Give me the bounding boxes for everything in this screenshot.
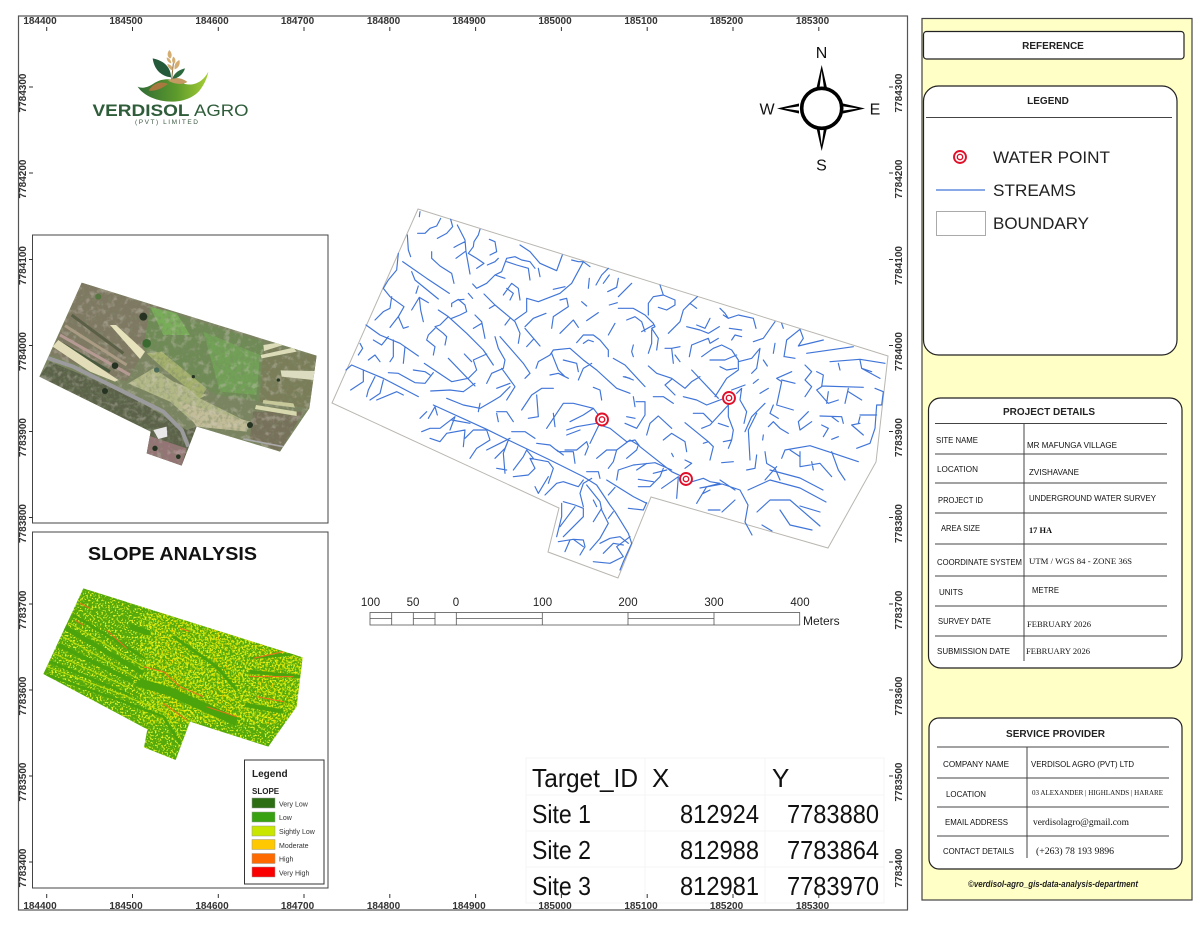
logo name: VERDISOL — [92, 102, 190, 120]
provider rows — [943, 759, 1163, 857]
project rows: ZVISHAVANE — [1029, 467, 1079, 477]
bottom coordinate labels: 185100 — [624, 901, 658, 912]
row: site 1: 812924 — [680, 799, 759, 829]
row: site 3: 812981 — [680, 871, 759, 901]
provider rows: COMPANY NAME — [943, 759, 1009, 769]
provider rows: LOCATION — [946, 789, 986, 799]
scale bar: 300 — [704, 597, 724, 609]
project rows: UTM / WGS 84 - ZONE 36S — [1029, 556, 1132, 566]
logo emblem — [138, 50, 208, 102]
top coordinate labels: 185300 — [796, 16, 830, 27]
right coordinate labels: 7783900 — [894, 418, 905, 457]
slope class: moderate: Moderate — [279, 843, 309, 850]
panel: project details — [928, 398, 1182, 668]
table header: Target_ID — [532, 763, 638, 793]
legend: streams — [936, 182, 1076, 200]
left coordinate labels: 7784300 — [18, 73, 29, 112]
top coordinate labels: 184400 — [23, 16, 57, 27]
provider rows: (+263) 78 193 9896 — [1036, 846, 1114, 857]
project rows: UNITS — [939, 587, 963, 597]
table header: Y — [772, 763, 789, 793]
north arrow compass: W — [759, 102, 775, 118]
panel: project details: PROJECT DETAILS — [1003, 406, 1095, 418]
project rows: METRE — [1032, 585, 1059, 595]
north arrow compass — [759, 45, 880, 174]
row: site 1: 7783880 — [787, 799, 879, 829]
left coordinate labels: 7783700 — [18, 590, 29, 629]
left coordinate labels: 7783600 — [18, 676, 29, 715]
left coordinate labels — [18, 73, 33, 887]
bottom coordinate labels: 184400 — [23, 901, 57, 912]
reference title box — [924, 32, 1184, 59]
project rows: PROJECT ID — [938, 495, 983, 505]
scale bar: Meters — [803, 614, 840, 628]
right coordinate labels: 7784100 — [894, 246, 905, 285]
row: site 2 — [532, 835, 879, 865]
project rows: FEBRUARY 2026 — [1026, 646, 1090, 656]
top coordinate labels: 185000 — [538, 16, 572, 27]
scale bar: 100 — [361, 597, 380, 609]
streams — [346, 212, 885, 570]
top coordinate labels: 184500 — [109, 16, 143, 27]
north arrow compass: E — [870, 102, 880, 118]
slope class: slightly low: Sightly Low — [279, 829, 316, 836]
legend: water point: WATER POINT — [993, 149, 1110, 167]
panel: legend — [924, 86, 1177, 355]
bottom coordinate labels: 184900 — [452, 901, 486, 912]
aerial image of site — [39, 282, 317, 466]
slope class: very high: Very High — [279, 870, 309, 878]
scale bar: 400 — [790, 597, 810, 609]
right coordinate labels: 7784300 — [894, 73, 905, 112]
top coordinate labels: 184900 — [452, 16, 486, 27]
right coordinate labels: 7783500 — [894, 762, 905, 801]
reference title box: REFERENCE — [1022, 41, 1084, 52]
panel: reference sidebar — [922, 18, 1192, 900]
logo sub-name: (PVT) LIMITED — [135, 119, 198, 126]
left coordinate labels: 7783900 — [18, 418, 29, 457]
top coordinate labels: 184600 — [195, 16, 229, 27]
scale bar: 50 — [407, 597, 419, 609]
left coordinate labels: 7784100 — [18, 246, 29, 285]
top coordinate labels: 184800 — [367, 16, 401, 27]
slope raster map — [43, 588, 303, 760]
scale bar: 200 — [618, 597, 638, 609]
slope heading: SLOPE ANALYSIS — [88, 544, 257, 564]
project rows: COORDINATE SYSTEM — [937, 557, 1022, 567]
row: site 2: 812988 — [680, 835, 759, 865]
right coordinate labels: 7783700 — [894, 590, 905, 629]
row: site 3: Site 3 — [532, 871, 591, 901]
bottom coordinate labels — [23, 894, 830, 912]
left coordinate labels: 7784000 — [18, 332, 29, 371]
left coordinate labels: 7783500 — [18, 762, 29, 801]
legend: boundary — [936, 212, 1089, 236]
top coordinate labels: 185200 — [710, 16, 744, 27]
provider rows: EMAIL ADDRESS — [945, 817, 1008, 827]
project rows: SITE NAME — [936, 435, 978, 445]
row: site 2: Site 2 — [532, 835, 591, 865]
scale bar: 100 — [533, 597, 552, 609]
project rows: FEBRUARY 2026 — [1027, 619, 1091, 629]
right coordinate labels: 7783600 — [894, 676, 905, 715]
logo — [92, 50, 249, 126]
project rows: LOCATION — [937, 464, 978, 474]
stream network map — [332, 209, 888, 578]
inset panel: aerial photo — [30, 235, 330, 523]
slope legend — [244, 760, 324, 884]
slope class: very low: Very Low — [279, 802, 309, 808]
slope class: low: Low — [279, 815, 293, 822]
legend: boundary: BOUNDARY — [993, 215, 1089, 233]
bottom coordinate labels: 184500 — [109, 901, 143, 912]
top coordinate labels: 184700 — [281, 16, 315, 27]
scale bar: 0 — [453, 597, 459, 609]
top coordinate labels: 185100 — [624, 16, 658, 27]
panel: service provider: SERVICE PROVIDER — [1006, 728, 1105, 740]
provider rows: 03 ALEXANDER | HIGHLANDS | HARARE — [1032, 788, 1163, 797]
left coordinate labels: 7783800 — [18, 504, 29, 543]
water point: site south — [680, 473, 692, 485]
bottom coordinate labels: 185200 — [710, 901, 744, 912]
row: site 3: 7783970 — [787, 871, 879, 901]
provider rows: verdisolagro@gmail.com — [1033, 818, 1130, 828]
logo: AGRO — [194, 102, 249, 120]
table header — [532, 763, 789, 793]
row: site 2: 7783864 — [787, 835, 879, 865]
row: site 1: Site 1 — [532, 799, 591, 829]
left coordinate labels: 7783400 — [18, 848, 29, 887]
bottom coordinate labels: 184700 — [281, 901, 315, 912]
copyright note: ©verdisol-agro_gis-data-analysis-department — [968, 879, 1139, 889]
project rows: SUBMISSION DATE — [937, 646, 1010, 656]
right coordinate labels: 7784200 — [894, 159, 905, 198]
north arrow compass: S — [816, 158, 827, 174]
map frame — [18, 16, 908, 910]
project rows: UNDERGROUND WATER SURVEY — [1029, 493, 1156, 503]
bottom coordinate labels: 184600 — [195, 901, 229, 912]
row: site 3 — [532, 871, 879, 901]
water point: site north-east — [723, 392, 735, 404]
table header: X — [652, 763, 669, 793]
inset panel: slope analysis — [30, 532, 328, 888]
slope legend: SLOPE — [252, 787, 280, 796]
right coordinate labels: 7784000 — [894, 332, 905, 371]
right coordinate labels — [889, 73, 905, 887]
legend: streams: STREAMS — [993, 182, 1076, 200]
bottom coordinate labels: 185000 — [538, 901, 572, 912]
row: site 1 — [532, 799, 879, 829]
project rows: SURVEY DATE — [938, 616, 991, 626]
provider rows: VERDISOL AGRO (PVT) LTD — [1031, 759, 1134, 769]
slope legend: Legend — [252, 769, 288, 780]
project rows: AREA SIZE — [941, 523, 980, 533]
panel: legend: LEGEND — [1027, 96, 1069, 107]
bottom coordinate labels: 185300 — [796, 901, 830, 912]
project rows: 17 HA — [1029, 525, 1053, 535]
provider rows: CONTACT DETAILS — [943, 846, 1014, 856]
bottom coordinate labels: 184800 — [367, 901, 401, 912]
left coordinate labels: 7784200 — [18, 159, 29, 198]
project rows: MR MAFUNGA VILLAGE — [1027, 440, 1117, 450]
site boundary — [332, 209, 888, 578]
north arrow compass: N — [816, 45, 827, 62]
panel: service provider — [929, 718, 1182, 869]
top coordinate labels — [23, 16, 830, 31]
right coordinate labels: 7783400 — [894, 848, 905, 887]
project rows — [936, 435, 1156, 656]
scale bar — [361, 597, 840, 628]
coordinates table — [526, 758, 884, 903]
right coordinate labels: 7783800 — [894, 504, 905, 543]
slope class: high: High — [279, 856, 294, 864]
water point: site centre — [596, 414, 608, 426]
